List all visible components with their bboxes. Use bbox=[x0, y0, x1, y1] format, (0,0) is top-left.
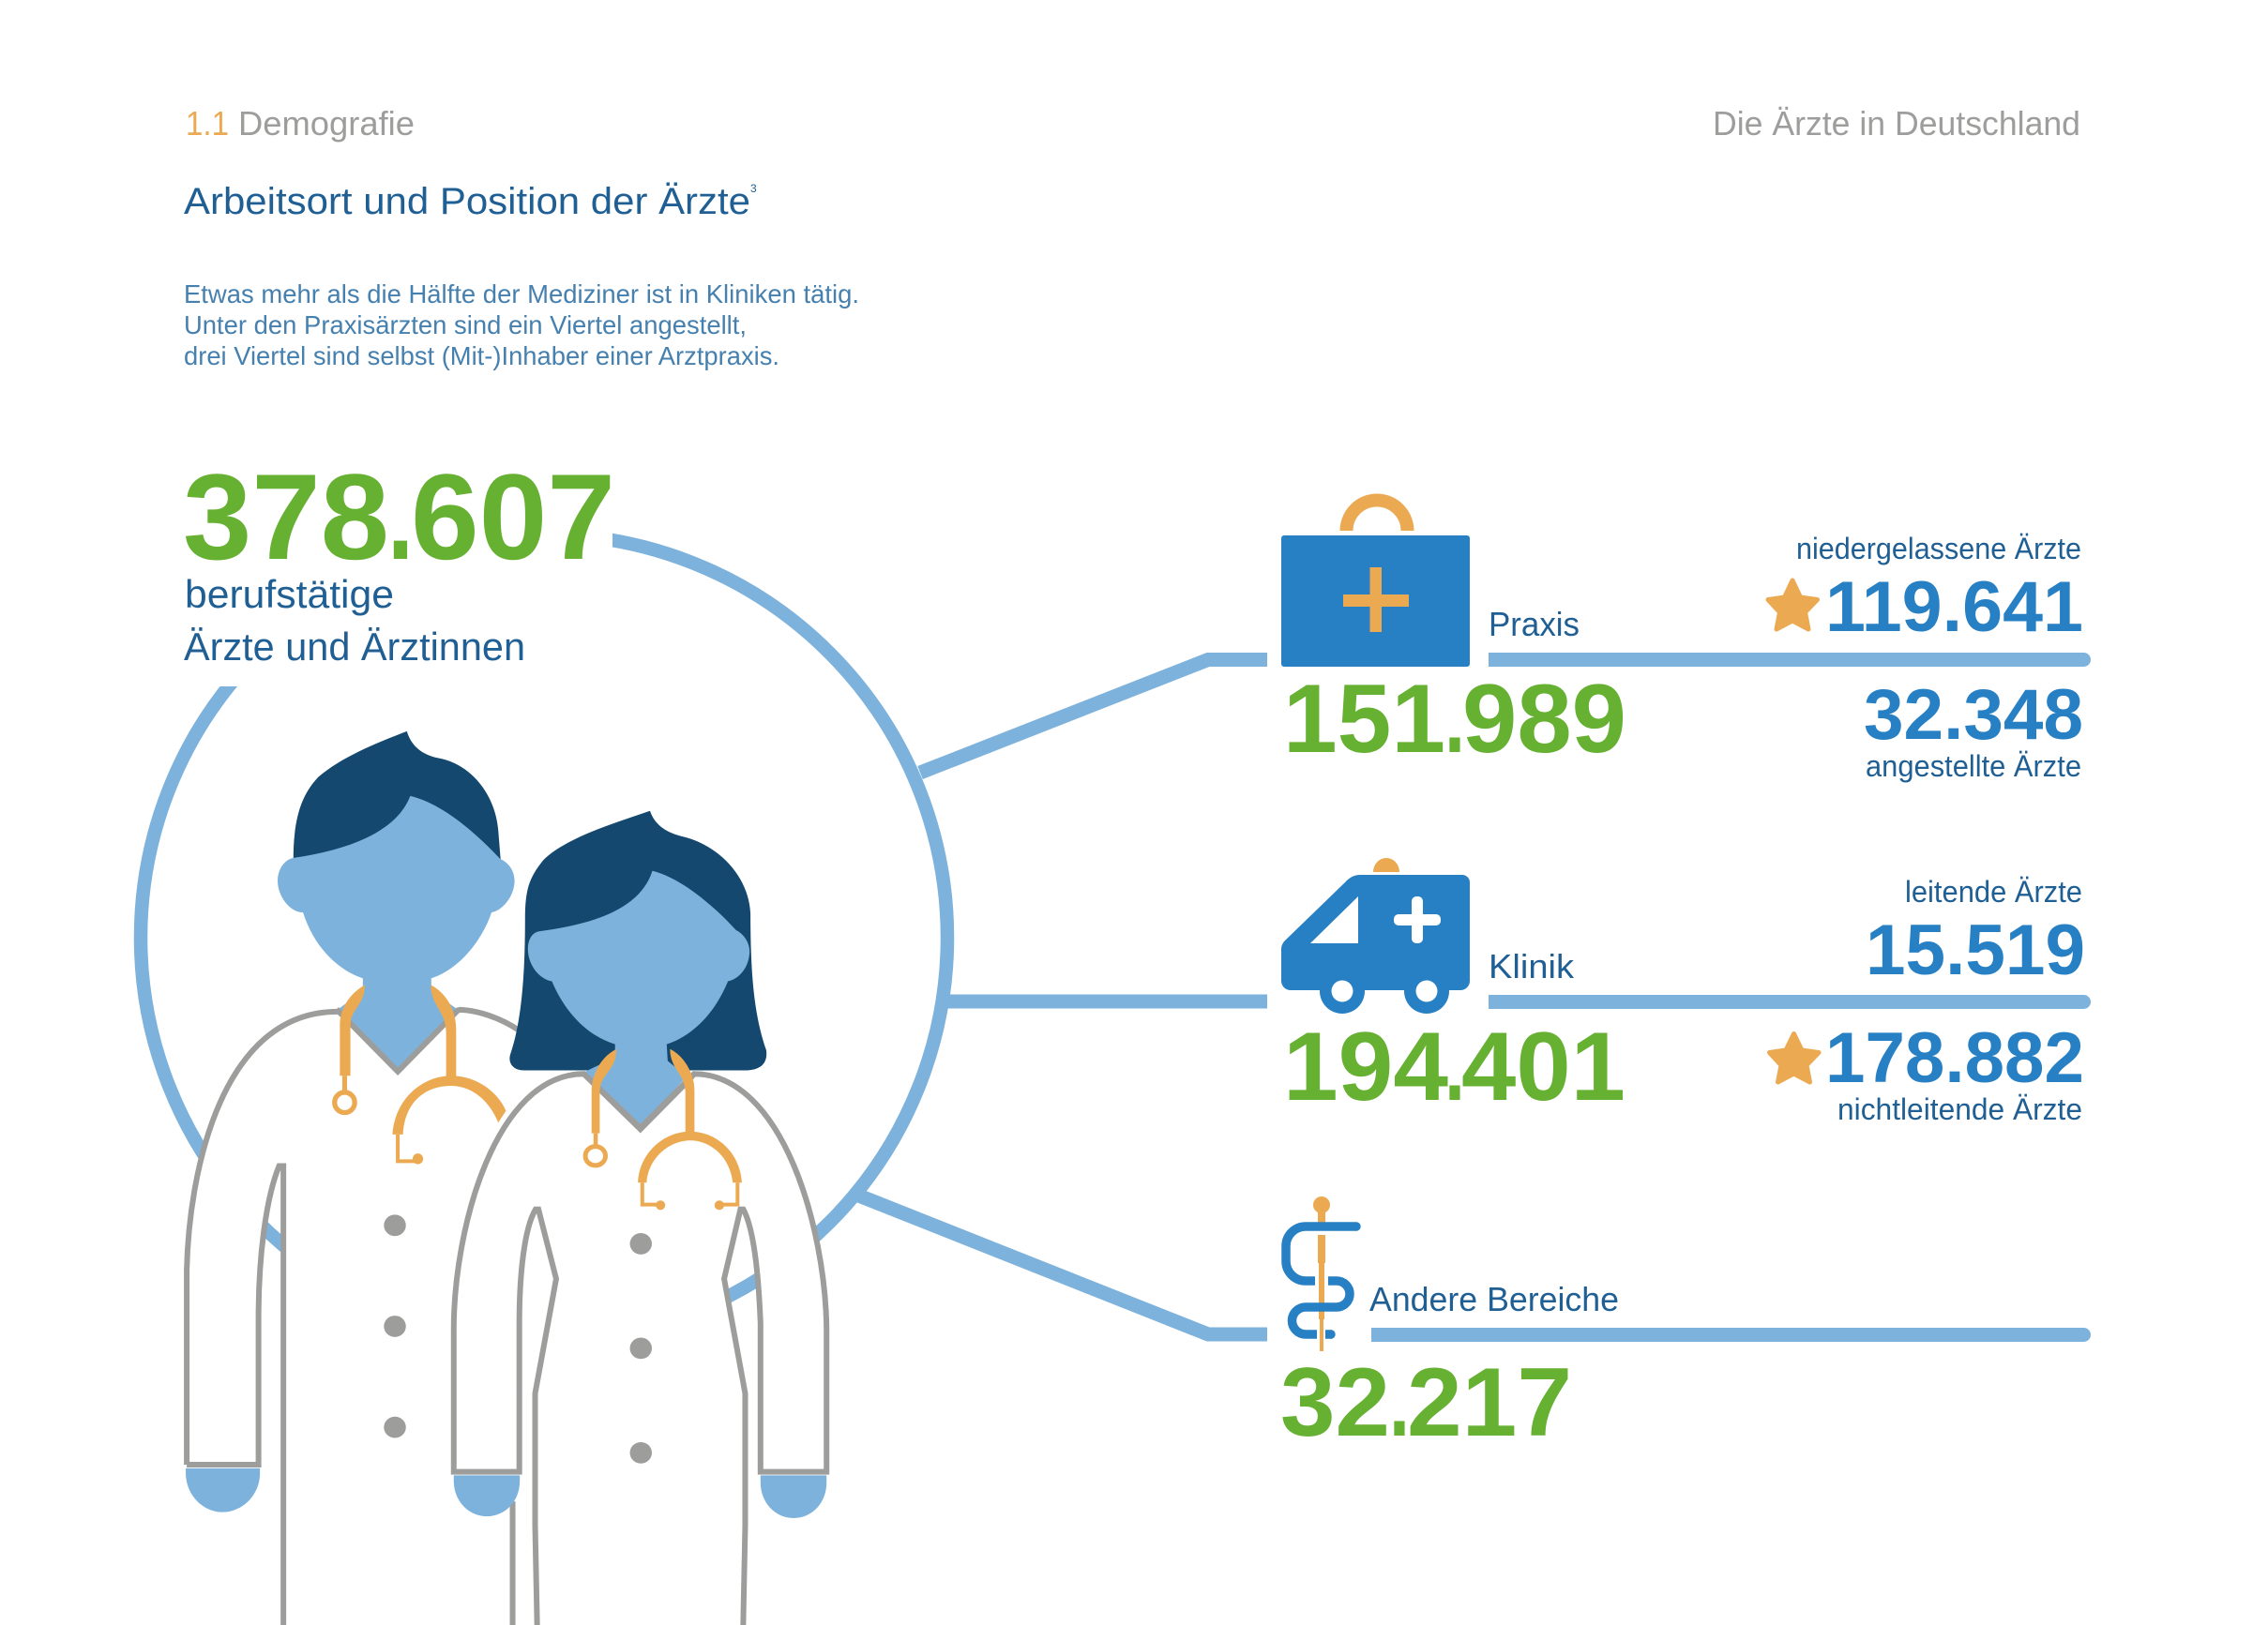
divider bar bbox=[1371, 1328, 2091, 1342]
number: Praxis total: 151 bbox=[1283, 665, 1445, 774]
doctors illustration bbox=[186, 731, 826, 1625]
label: angestellte: angestellte Ärzte bbox=[1866, 749, 2081, 783]
female doctor bbox=[454, 811, 826, 1625]
intro text: drei Viertel sind selbst (Mit-)Inhaber einer Arztpraxis. bbox=[184, 341, 779, 370]
male collar bbox=[337, 1009, 459, 1072]
icon: medical bag bbox=[1281, 501, 1470, 667]
number: Andere total: 32 bbox=[1280, 1348, 1390, 1457]
total label bbox=[184, 572, 525, 669]
panel: Klinik bbox=[1281, 858, 2091, 1126]
number: angestellte: 32.348 bbox=[1864, 675, 2083, 755]
section heading: 1.1 bbox=[186, 104, 229, 143]
label: Klinik: Klinik bbox=[1489, 947, 1575, 986]
icon: star bbox=[1769, 1033, 1819, 1082]
connector: Klinik bbox=[945, 994, 1267, 1009]
female hand right bbox=[761, 1475, 826, 1518]
divider bar bbox=[1489, 653, 2091, 667]
ring around doctors bbox=[141, 534, 947, 1341]
number: leitende: 15.519 bbox=[1866, 910, 2085, 990]
male hand bbox=[186, 1468, 260, 1512]
icon: star bbox=[1768, 580, 1818, 629]
number: Praxis total: 989 bbox=[1462, 665, 1626, 774]
number: Andere total: 217 bbox=[1407, 1348, 1572, 1457]
intro text bbox=[184, 279, 859, 370]
male buttons bbox=[384, 1214, 406, 1438]
female buttons bbox=[630, 1233, 652, 1464]
icon: ambulance bbox=[1281, 858, 1470, 1014]
number: Praxis total bbox=[1283, 665, 1626, 774]
number: niedergelassene: 119.641 bbox=[1825, 567, 2083, 647]
icon: rod of Asclepius bbox=[1286, 1196, 1361, 1351]
total number: 378 bbox=[183, 448, 389, 585]
total number bbox=[183, 448, 615, 585]
label: nichtleitende: nichtleitende Ärzte bbox=[1837, 1092, 2082, 1126]
female hand left bbox=[454, 1475, 520, 1516]
label: Praxis: Praxis bbox=[1489, 605, 1580, 643]
female coat bbox=[454, 1074, 826, 1625]
total number: . bbox=[387, 448, 414, 585]
number: nichtleitende: 178.882 bbox=[1825, 1018, 2084, 1098]
number: Andere total: . bbox=[1389, 1348, 1410, 1457]
male coat outline bbox=[187, 1010, 520, 1625]
male stethoscope bbox=[335, 985, 506, 1165]
number: Klinik total: 194 bbox=[1283, 1013, 1448, 1121]
intro text: Unter den Praxisärzten sind ein Viertel angestellt, bbox=[184, 310, 747, 339]
male doctor bbox=[186, 731, 543, 1625]
female hair bbox=[509, 811, 766, 1071]
connector: Praxis bbox=[920, 660, 1267, 773]
male coat fill bbox=[187, 1010, 543, 1625]
intro text: Etwas mehr als die Hälfte der Mediziner ist in Kliniken tätig. bbox=[184, 279, 859, 308]
section heading: Demografie bbox=[238, 104, 415, 143]
title: Arbeitsort und Position der Ärzte bbox=[184, 181, 750, 222]
connector: Andere Bereiche bbox=[856, 1195, 1267, 1334]
number: Klinik total bbox=[1283, 1013, 1625, 1121]
label: leitende: leitende Ärzte bbox=[1905, 875, 2082, 909]
female collar bbox=[584, 1074, 689, 1128]
female face and neck bbox=[528, 871, 749, 1127]
divider bar bbox=[1489, 995, 2091, 1009]
label: Andere Bereiche: Andere Bereiche bbox=[1369, 1280, 1619, 1318]
number: Klinik total: . bbox=[1444, 1013, 1465, 1121]
total number: 607 bbox=[411, 448, 615, 585]
number: Praxis total: . bbox=[1444, 665, 1465, 774]
title: 3 bbox=[750, 182, 757, 195]
panel: Andere Bereiche bbox=[1280, 1196, 2091, 1457]
panel: Praxis bbox=[1281, 501, 2091, 783]
total label: berufstätige bbox=[185, 572, 394, 616]
female stethoscope bbox=[585, 1049, 742, 1210]
label: niedergelassene: niedergelassene Ärzte bbox=[1796, 532, 2081, 565]
running header: Die Ärzte in Deutschland bbox=[1713, 104, 2080, 143]
total label: Ärzte und Ärztinnen bbox=[184, 624, 525, 669]
male hair bbox=[294, 731, 501, 866]
male face and neck bbox=[278, 796, 515, 1072]
text knockout over ring bbox=[122, 506, 612, 686]
number: Andere total bbox=[1280, 1348, 1572, 1457]
number: Klinik total: 401 bbox=[1461, 1013, 1625, 1121]
